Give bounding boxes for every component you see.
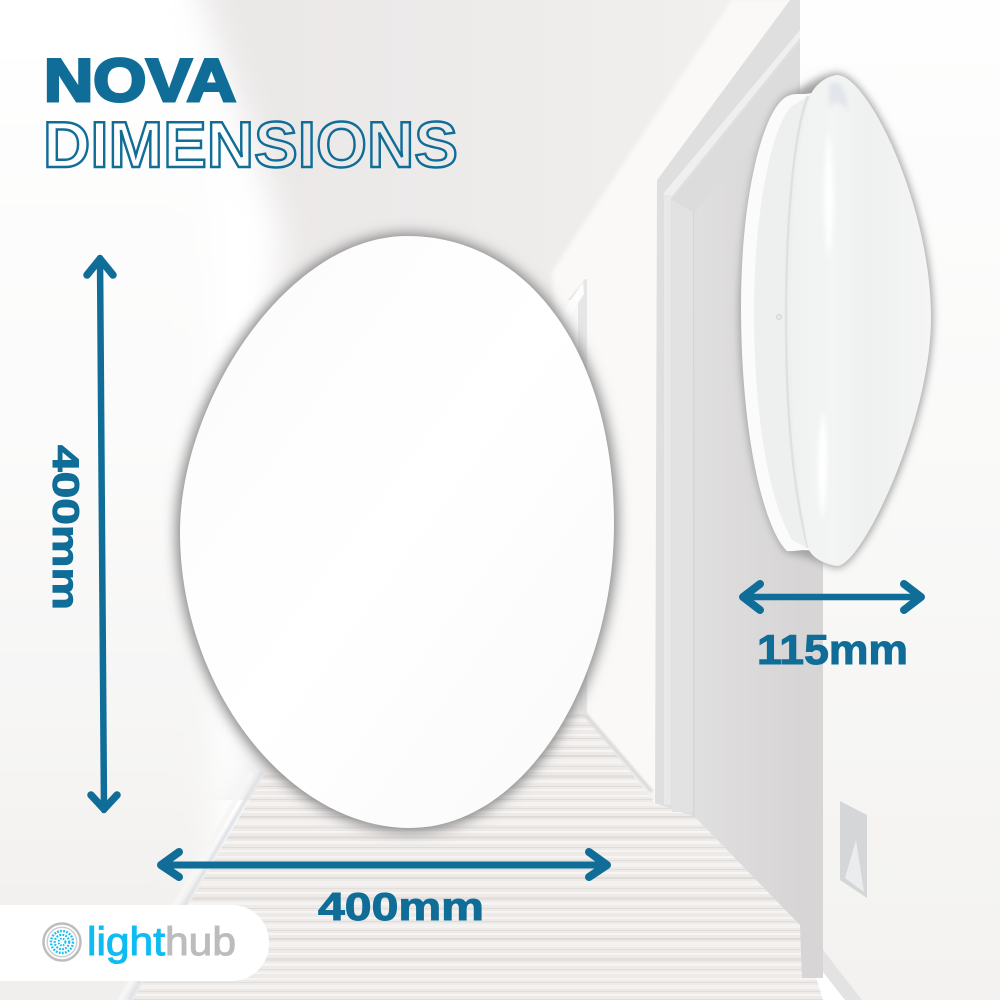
distant door bbox=[568, 279, 587, 716]
near skirting bbox=[823, 950, 862, 1000]
cap highlights bbox=[824, 130, 834, 260]
base ring bbox=[741, 92, 815, 552]
near right wall bbox=[800, 0, 1000, 1000]
main lamp: front view bbox=[177, 234, 617, 831]
ring body bbox=[754, 92, 815, 552]
right corridor wall bbox=[552, 0, 810, 800]
arrow: height dimension bbox=[87, 258, 117, 810]
label: height 400mm: 400mm bbox=[45, 445, 86, 610]
door frame highlight bbox=[663, 30, 800, 200]
door frame vertical mouldings bbox=[664, 195, 694, 817]
floor bbox=[133, 713, 823, 1000]
right skirting bbox=[584, 713, 652, 792]
door leaf bbox=[694, 88, 800, 925]
arrow: depth dimension bbox=[743, 584, 921, 610]
cap dome bbox=[791, 75, 931, 566]
wall light plate bbox=[840, 801, 867, 898]
door frame band bbox=[655, 0, 800, 925]
lamp shadow bbox=[177, 234, 617, 831]
logo icon bbox=[44, 924, 80, 960]
title line: NOVA: NOVA bbox=[44, 47, 236, 114]
title line: DIMENSIONS outline: DIMENSIONS bbox=[43, 108, 458, 181]
logo wordmark: lighthub bbox=[87, 920, 236, 964]
lamp body bbox=[180, 236, 614, 828]
left wall bbox=[0, 0, 282, 1000]
door edge panel bbox=[800, 330, 823, 978]
left skirting bbox=[129, 772, 262, 1000]
side lamp shadow bbox=[739, 73, 933, 568]
ceiling and back wall bbox=[100, 0, 800, 800]
logo badge bbox=[0, 905, 269, 981]
cap top tint bbox=[829, 82, 848, 110]
side lamp: profile view bbox=[739, 73, 933, 568]
ring groove bbox=[786, 96, 808, 548]
title bbox=[43, 47, 458, 181]
sensor dimple bbox=[776, 314, 782, 320]
arrow: width dimension bbox=[161, 852, 607, 877]
label: width 400mm: 400mm bbox=[318, 886, 484, 929]
label: depth 115mm: 115mm bbox=[757, 626, 908, 673]
badge pill bbox=[0, 905, 269, 981]
